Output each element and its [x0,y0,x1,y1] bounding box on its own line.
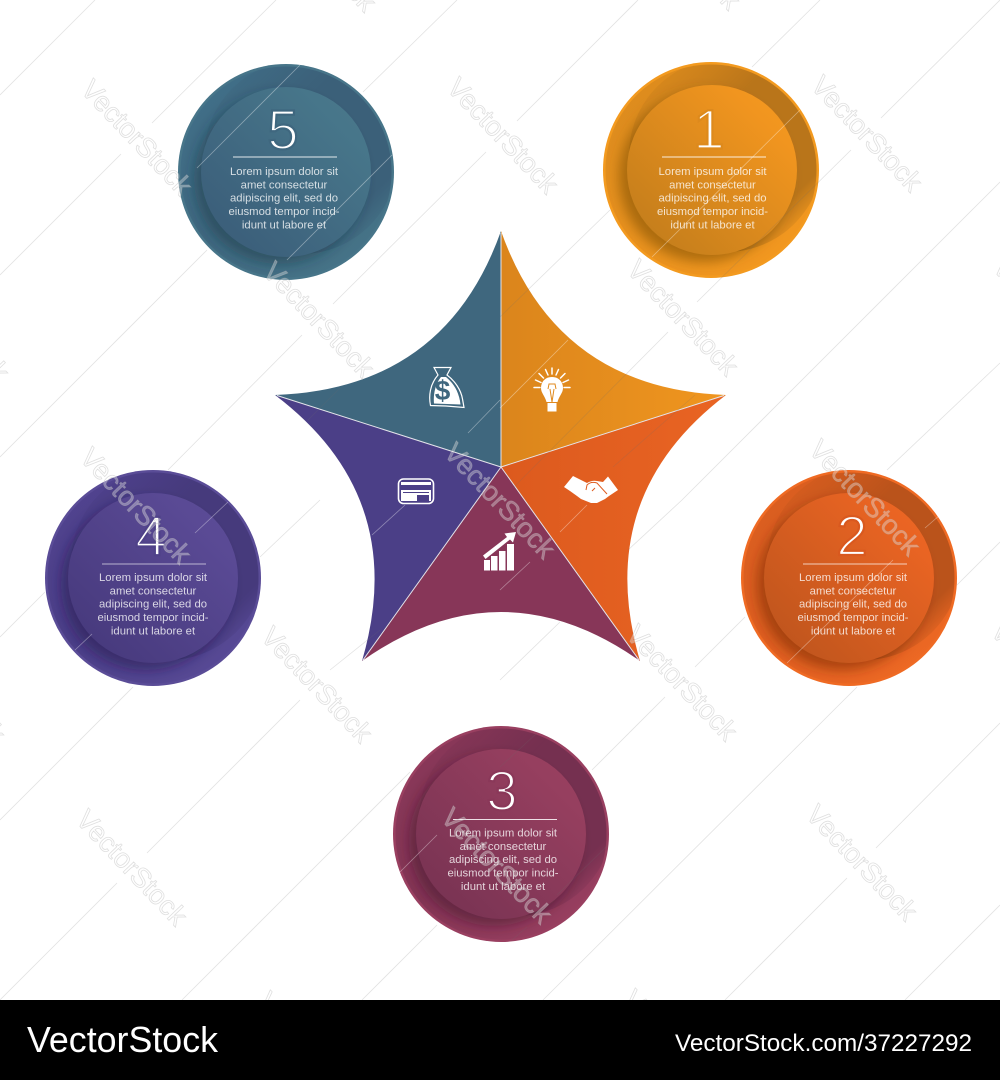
circle 5: teal [178,60,398,280]
description 2: Lorem ipsum dolor sit [799,572,908,584]
description 1: adipiscing elit, sed do [658,193,767,205]
description 3: idunt ut labore et [461,881,546,893]
watermarks: VectorStock [75,74,199,202]
description 4: eiusmod tempor incid- [97,612,209,624]
description 5: adipiscing elit, sed do [230,193,338,205]
dark crescent and soft shadow [409,722,613,926]
number 2: 2 [836,504,868,567]
star segment 1: orange [501,231,726,467]
number 1: 1 [693,98,725,160]
description 2: amet consectetur [810,585,897,597]
central star diagram [275,231,726,661]
description 3: amet consectetur [460,841,547,853]
icon: money bag [430,368,464,408]
circle 2: red orange [741,466,961,686]
icon: money bag: $ [435,375,451,406]
watermarks: VectorStock [800,799,924,927]
description 4: adipiscing elit, sed do [99,599,207,611]
icon: handshake [564,476,618,503]
number 4: 4 [135,504,167,567]
watermarks: VectorStock [620,619,744,747]
footer bar [0,1000,1000,1080]
footer image id: VectorStock.com/37227292 [675,1030,972,1057]
star segment 3: maroon [362,467,640,661]
watermarks: VectorStock [70,804,194,932]
description 2: eiusmod tempor incid- [797,612,909,624]
dark crescent and soft shadow [757,466,961,670]
description 4: amet consectetur [110,585,197,597]
dark crescent and soft shadow [619,58,823,262]
watermarks: VectorStock [255,621,379,749]
watermarks: VectorStock [803,434,927,562]
icon: light bulb [534,368,570,412]
description 1: amet consectetur [669,179,756,191]
footer logo text: VectorStock [27,1019,219,1060]
star segment 5: teal [275,231,501,467]
icon: credit card [398,479,434,504]
icon: growth chart [483,532,516,570]
description 1: idunt ut labore et [670,219,755,231]
circle 1: orange [603,58,823,278]
number 3: 3 [486,759,518,822]
description 5: amet consectetur [241,179,328,191]
description 5: eiusmod tempor incid- [228,206,340,218]
description 4: Lorem ipsum dolor sit [99,572,208,584]
description 2: adipiscing elit, sed do [799,599,907,611]
watermarks: VectorStock [805,70,929,198]
star segment 4: purple [275,395,501,661]
watermarks: VectorStock [621,254,745,382]
number 5: 5 [267,98,299,161]
description 1: Lorem ipsum dolor sit [658,166,767,178]
description 3: eiusmod tempor incid- [447,868,559,880]
watermarks: VectorStock [438,437,562,565]
dark crescent and soft shadow [61,466,265,670]
description 4: idunt ut labore et [111,625,196,637]
description 5: Lorem ipsum dolor sit [230,166,339,178]
star segment 2: red orange [501,395,726,661]
description 3: Lorem ipsum dolor sit [449,828,558,840]
watermarks: VectorStock [74,442,198,570]
description 1: eiusmod tempor incid- [657,206,768,218]
circle 4: purple [45,466,265,686]
watermarks: VectorStock [435,802,559,930]
watermarks: VectorStock [257,256,381,384]
circle 3: maroon [393,722,613,942]
description 3: adipiscing elit, sed do [449,854,557,866]
dark crescent and soft shadow [194,60,398,264]
description 5: idunt ut labore et [242,219,327,231]
description 2: idunt ut labore et [811,625,896,637]
watermarks: VectorStock [441,72,565,200]
